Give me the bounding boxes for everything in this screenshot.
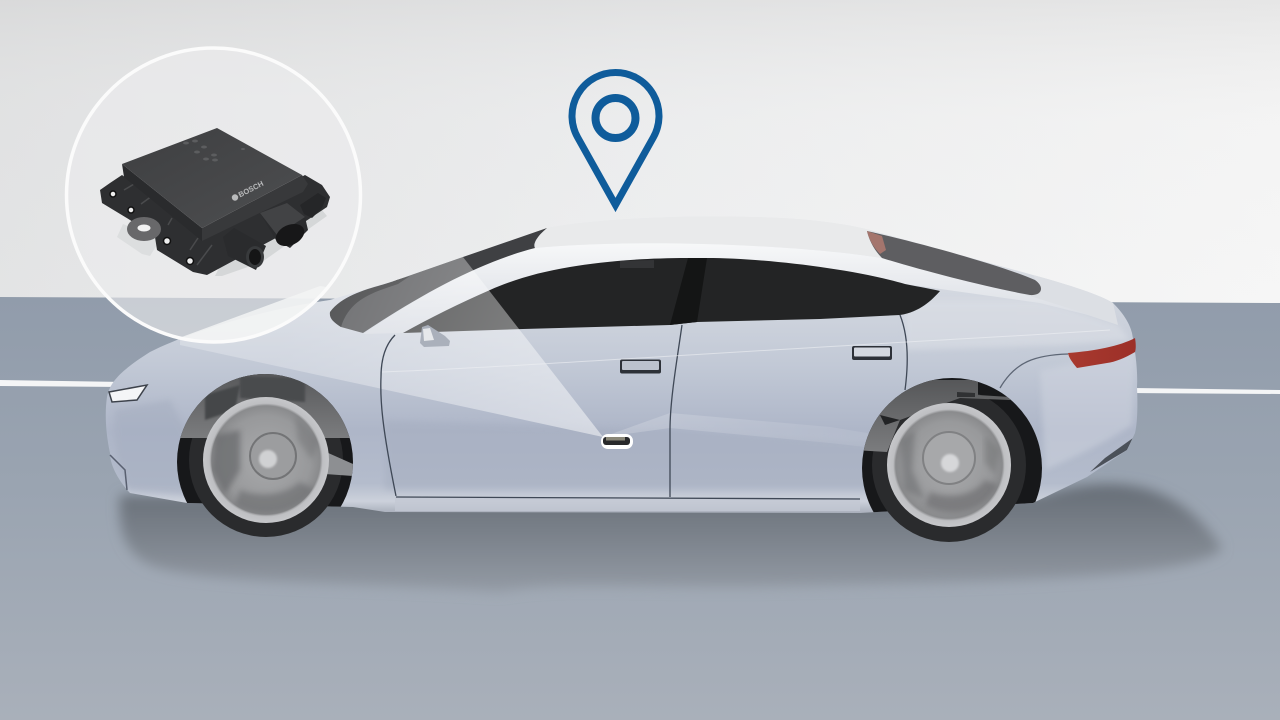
rear glass — [867, 231, 1041, 295]
metal plate left — [117, 224, 160, 256]
taillight — [1068, 338, 1136, 368]
front bumper vent — [110, 455, 127, 490]
lens circle with control unit — [66, 47, 362, 345]
pin outline — [572, 72, 659, 205]
side mirror — [420, 325, 450, 347]
rear clip — [300, 193, 326, 218]
car body — [106, 216, 1137, 513]
housing right side — [202, 175, 308, 241]
large connector — [260, 203, 308, 250]
housing left side — [122, 164, 202, 241]
rear wheel — [887, 403, 1011, 527]
windshield — [332, 228, 547, 333]
front door handle — [620, 360, 661, 374]
sensor module in door — [601, 434, 633, 449]
brand mark: BOSCH — [237, 179, 265, 199]
background wall — [0, 0, 1280, 304]
road surface — [0, 297, 1280, 720]
window reflection — [620, 260, 654, 268]
rear light beam — [612, 413, 804, 440]
body shading — [114, 300, 1135, 511]
housing top — [122, 128, 302, 228]
character line — [382, 330, 1110, 372]
top marks — [183, 140, 245, 162]
sensor light cone — [180, 257, 804, 440]
hood highlight in lens — [182, 288, 318, 340]
rear glass reflection — [867, 231, 886, 254]
road lane marking right — [1130, 388, 1280, 394]
rear tyre — [872, 388, 1026, 542]
car ground shadow — [120, 484, 1222, 592]
mounting flange — [100, 175, 330, 275]
lens background — [66, 47, 362, 343]
mounting ring — [127, 217, 161, 241]
control unit — [100, 128, 330, 276]
windshield cowl — [330, 276, 410, 327]
rear door handle — [852, 346, 892, 360]
mounting holes — [110, 191, 194, 264]
metal plate right — [215, 210, 327, 276]
roof panel — [535, 216, 882, 258]
trunk lid — [882, 258, 1118, 325]
car — [106, 216, 1137, 558]
front suspension parts — [180, 374, 353, 476]
lens ring — [66, 48, 360, 342]
window pillar — [670, 258, 707, 325]
small connector — [223, 228, 266, 270]
front wheel — [203, 397, 329, 523]
pin centre ring — [596, 98, 636, 138]
road lane marking left — [0, 380, 125, 387]
door lines — [381, 315, 1068, 499]
headlight — [109, 385, 147, 402]
rear suspension parts — [855, 380, 1010, 452]
flange ribs — [124, 184, 212, 265]
rear rim blur — [900, 430, 1000, 512]
side windows — [403, 258, 940, 333]
front rim blur — [212, 415, 320, 513]
roof rail and A-pillar — [363, 243, 1100, 334]
front wheel arch — [177, 374, 353, 507]
front tyre — [189, 383, 343, 537]
location pin icon — [572, 72, 659, 205]
rear wheel arch — [862, 378, 1042, 512]
